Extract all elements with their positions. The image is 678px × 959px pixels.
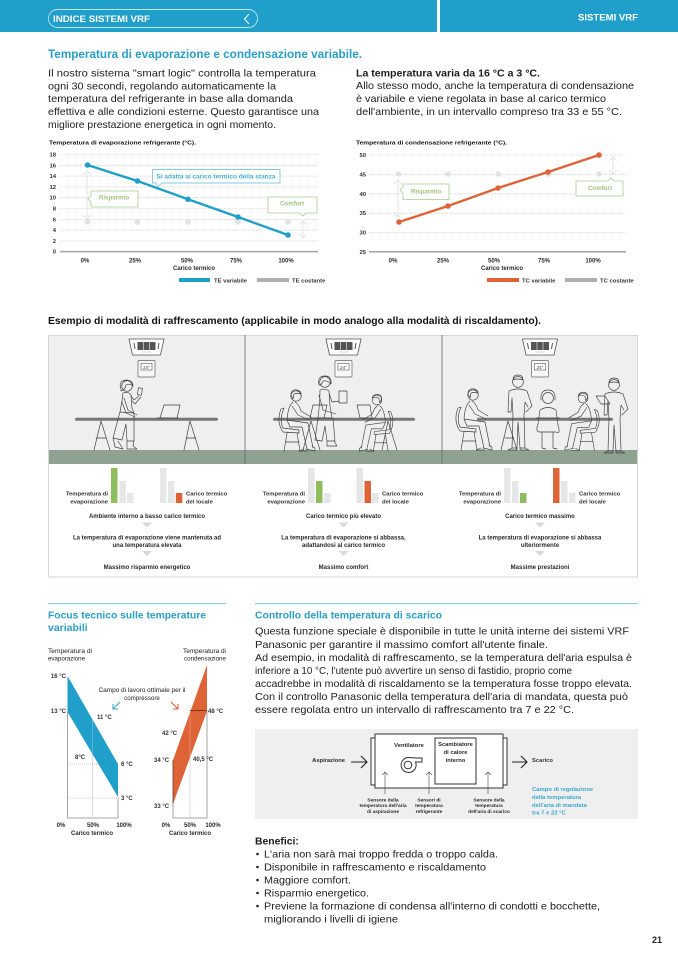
- intro text left: ogni 30 secondi, regolando automaticamente la: [48, 82, 276, 92]
- bar labels: del locale: [579, 500, 607, 506]
- control text: Questa funzione speciale è disponibile in tutte le unità interne dei sistemi VRF: [255, 626, 629, 638]
- flow text: La temperatura di evaporazione viene mantenuta ad: [73, 536, 221, 542]
- variable series line: [85, 162, 291, 238]
- callout: adapts: Si adatta al carico termico della stanza: [156, 174, 276, 180]
- intro text right: è variabile e viene regolata in base al carico termico: [356, 94, 606, 105]
- bar labels: [459, 492, 621, 506]
- y axis values: 2: [53, 239, 57, 245]
- condensation range chart: 33 °C: [154, 804, 170, 810]
- legend: TE costante: [292, 278, 326, 284]
- sensor labels: temperatura dell'aria: [360, 803, 407, 809]
- page header bar: [0, 0, 678, 32]
- constant series: [85, 219, 291, 225]
- y axis values: 8: [53, 206, 57, 212]
- chart: evaporation temperature: [49, 140, 326, 284]
- airflow labels: Aspirazione: [312, 758, 346, 764]
- axis titles: evaporazione: [48, 656, 86, 662]
- chart title: Temperatura di evaporazione refrigerante (°C).: [49, 140, 196, 146]
- ceiling unit: [326, 339, 361, 355]
- bar labels: Temperatura di: [263, 492, 305, 498]
- callout: saving: [88, 191, 138, 207]
- bar labels: Carico termico: [382, 492, 424, 498]
- x axis labels: 50%: [181, 258, 194, 264]
- condensation range chart: 100%: [205, 823, 221, 829]
- callout: saving: [400, 184, 449, 200]
- intro text left: migliore prestazione energetica in ogni momento.: [48, 120, 276, 131]
- bar labels: Carico termico: [186, 492, 228, 498]
- callout: comfort: Comfort: [588, 185, 612, 192]
- y axis values: 14: [49, 174, 57, 180]
- focus heading: Focus tecnico sulle temperature: [48, 610, 206, 622]
- standing woman: [113, 380, 142, 449]
- y axis values: 16: [49, 163, 57, 169]
- x axis labels: 0%: [81, 258, 90, 264]
- section label: SISTEMI VRF: [578, 12, 638, 24]
- evaporation range chart: 0%: [57, 823, 66, 829]
- navigation pill: [48, 10, 258, 28]
- y axis values: 12: [49, 185, 57, 191]
- unit labels: Ventilatore: [394, 743, 425, 749]
- flow text: ulteriormente: [521, 543, 560, 549]
- y axis values: 45: [359, 172, 367, 178]
- intro text right: La temperatura varia da 16 °C a 3 °C.: [356, 68, 540, 80]
- airflow arrows: [351, 756, 527, 768]
- panel: cooling scenarios: [48, 335, 638, 577]
- intro text left: [48, 68, 319, 131]
- intro text right: Allo stesso modo, anche la temperatura di condensazione: [356, 81, 634, 92]
- bar labels: [263, 492, 424, 506]
- sensor labels: di aspirazione: [367, 809, 399, 815]
- bar labels: [66, 492, 228, 506]
- bar labels: evaporazione: [267, 500, 306, 506]
- thermostat: [335, 360, 352, 377]
- evaporation range chart: 100%: [116, 823, 132, 829]
- evaporation range chart: 6 °C: [121, 762, 133, 768]
- evaporation range chart: 3 °C: [121, 796, 133, 802]
- bar labels: Temperatura di: [459, 492, 501, 498]
- thermostat: 24°: [537, 365, 544, 370]
- flow text: La temperatura di evaporazione si abbassa: [479, 536, 602, 542]
- sensor labels: Sensore della: [367, 798, 399, 804]
- intro text right: dell'ambiente, in un intervallo compreso tra 33 e 55 °C.: [356, 107, 622, 118]
- scene 1: low load: [75, 339, 218, 450]
- x axis labels: 75%: [538, 258, 551, 264]
- evaporation range chart: [51, 674, 133, 837]
- evaporation range chart: 8°C: [75, 755, 86, 761]
- regulation note: Campo di regolazione: [532, 787, 594, 793]
- x axis labels: [389, 258, 601, 272]
- axis titles: [48, 648, 227, 662]
- scene 2 bars and text: [263, 468, 424, 571]
- optimal range label: [98, 687, 186, 702]
- people: [456, 375, 628, 453]
- legend: TC costante: [600, 278, 634, 284]
- airflow labels: Scarico: [532, 758, 553, 764]
- people and laptops: [279, 376, 393, 451]
- y axis values: [359, 153, 367, 256]
- evaporation bars: [308, 468, 330, 503]
- flow text: Massime prestazioni: [511, 565, 570, 571]
- benefits list: Risparmio energetico.: [264, 888, 369, 900]
- flow text: una temperatura elevata: [112, 543, 182, 549]
- sensor labels: Sensore della: [473, 798, 505, 804]
- flow text: [479, 514, 602, 571]
- sensor labels: refrigerante: [416, 809, 443, 815]
- thermostat: [138, 360, 155, 377]
- sensor labels: [360, 798, 510, 815]
- indoor unit diagram: [255, 729, 638, 819]
- condensation range chart: 34 °C: [154, 758, 170, 764]
- y axis values: 30: [359, 231, 367, 237]
- callout: saving: Risparmio: [411, 188, 441, 196]
- benefits list: Previene la formazione di condensa all'interno di condotti e bocchette,: [264, 902, 600, 912]
- x axis labels: Carico termico: [481, 266, 523, 272]
- legend: [487, 278, 634, 284]
- optimal range label: Campo di lavoro ottimale per il: [98, 687, 186, 694]
- condensation range chart: 50%: [184, 823, 197, 829]
- flow text: Carico termico più elevato: [306, 514, 381, 520]
- y axis values: 18: [49, 152, 57, 158]
- page number: 21: [652, 935, 662, 945]
- flow text: Carico termico massimo: [505, 514, 575, 520]
- y axis values: 40: [359, 192, 367, 198]
- table: [75, 418, 218, 450]
- flow text: Massimo risparmio energetico: [104, 565, 191, 571]
- ceiling unit: [129, 339, 164, 355]
- legend: TE variabile: [214, 278, 248, 284]
- evaporation range chart: 50%: [87, 823, 100, 829]
- legend: TC variabile: [522, 278, 556, 284]
- evaporation range chart: 11 °C: [97, 715, 112, 721]
- flow text: Massimo comfort: [319, 565, 368, 571]
- bar labels: evaporazione: [70, 500, 109, 506]
- arrow: blue: [113, 702, 120, 709]
- control text: Ad esempio, in modalità di raffrescamento, se la temperatura dell'aria espulsa è: [255, 653, 632, 664]
- airflow labels: [312, 758, 553, 764]
- panel: technical focus: [48, 603, 227, 837]
- callout: saving: Risparmio: [99, 194, 129, 202]
- callout: comfort: [268, 197, 317, 216]
- scene 1 bars and text: [66, 468, 228, 571]
- intro text left: Il nostro sistema "smart logic" controlla la temperatura: [48, 68, 316, 80]
- comfort range arrows: [394, 157, 617, 217]
- control text: Panasonic per garantire il massimo comfort all'utente finale.: [255, 640, 548, 651]
- load bars: [553, 468, 576, 503]
- legend: [179, 278, 326, 284]
- flow text: Ambiente interno a basso carico termico: [89, 514, 205, 520]
- y axis values: 50: [359, 153, 367, 159]
- x axis labels: [81, 258, 294, 272]
- focus heading: variabili: [48, 622, 88, 634]
- unit labels: Scambiatore: [438, 742, 474, 748]
- y axis values: 10: [49, 196, 57, 202]
- scene 3: maximum load: [456, 339, 628, 453]
- control text: accadrebbe in modalità di riscaldamento se la temperatura fosse troppo elevata.: [255, 679, 632, 690]
- unit labels: di calore: [444, 750, 468, 756]
- control text: inferiore a 10 °C, l'utente può avvertire un senso di fastidio, proprio come: [255, 666, 572, 677]
- evaporation bars: [111, 468, 134, 503]
- sensor arrows: [382, 772, 491, 794]
- optimal range label: compressore: [124, 695, 160, 702]
- x axis labels: 100%: [585, 258, 601, 264]
- y axis values: 4: [53, 228, 57, 234]
- flow text: La temperatura di evaporazione si abbassa,: [281, 536, 406, 542]
- axis titles: condensazione: [184, 656, 227, 662]
- table: [273, 418, 415, 450]
- scene 2: higher load: [273, 339, 415, 451]
- navigation pill: INDICE SISTEMI VRF: [53, 14, 150, 25]
- scene 3 bars and text: [459, 468, 621, 571]
- bar labels: del locale: [382, 500, 410, 506]
- focus heading: [48, 610, 206, 634]
- load bars: [160, 468, 182, 503]
- benefits list: L'aria non sarà mai troppo fredda o troppo calda.: [264, 850, 498, 860]
- condensation range chart: 0%: [162, 823, 171, 829]
- evaporation range chart: 16 °C: [51, 674, 67, 680]
- condensation range chart: [154, 665, 224, 837]
- regulation note: [532, 787, 594, 816]
- chart: condensation temperature: [356, 140, 634, 284]
- callout: comfort: Comfort: [280, 200, 304, 208]
- sensor labels: temperatura: [475, 803, 503, 809]
- variable series line: [396, 152, 602, 225]
- y axis values: 25: [359, 250, 367, 256]
- intro text right: [356, 68, 634, 118]
- bar labels: Carico termico: [579, 492, 621, 498]
- thermostat: [532, 360, 548, 377]
- x axis labels: 25%: [437, 258, 450, 264]
- sensor labels: Sensori di: [417, 798, 441, 804]
- chart title: Temperatura di condensazione refrigerante (°C).: [356, 140, 507, 146]
- bar labels: del locale: [186, 500, 214, 506]
- condensation range chart: 48 °C: [208, 709, 224, 715]
- benefits list: migliorando i livelli di igiene: [264, 914, 398, 926]
- x axis labels: 25%: [129, 258, 142, 264]
- x axis labels: 50%: [488, 258, 501, 264]
- condensation range chart: Carico termico: [169, 831, 211, 837]
- load bars: [356, 468, 378, 503]
- table: [477, 418, 613, 450]
- benefits list: Maggiore comfort.: [264, 876, 351, 886]
- control heading: Controllo della temperatura di scarico: [255, 610, 442, 622]
- intro text left: effettiva e alle condizioni esterne. Questo garantisce una: [48, 107, 319, 118]
- flow text: [281, 514, 406, 571]
- ceiling unit: [522, 339, 558, 355]
- bar labels: Temperatura di: [66, 492, 108, 498]
- panel: discharge temperature control: [255, 603, 638, 926]
- control text: essere regolata entro un intervallo di raffrescamento tra 7 e 22 °C.: [255, 705, 574, 716]
- regulation note: dell'aria di mandata: [532, 803, 587, 809]
- unit casing: [371, 734, 507, 788]
- y axis values: 6: [53, 217, 57, 223]
- constant series: [396, 171, 602, 177]
- sensor labels: dell'aria di scarico: [468, 809, 510, 815]
- y axis values: 0: [53, 250, 57, 256]
- evaporation range chart: Carico termico: [71, 831, 113, 837]
- axis titles: Temperatura di: [183, 648, 226, 655]
- control text: [255, 626, 632, 716]
- benefits list: Disponibile in raffrescamento e riscaldamento: [264, 862, 486, 874]
- evaporation bars: [504, 468, 526, 503]
- condensation range chart: 40,5 °C: [193, 757, 214, 763]
- x axis labels: 0%: [389, 258, 398, 264]
- benefits list: [255, 836, 600, 926]
- callout: comfort: [576, 178, 623, 196]
- x axis labels: 100%: [278, 258, 294, 264]
- x axis labels: 75%: [230, 258, 243, 264]
- flow text: [73, 514, 221, 571]
- regulation note: della temperatura: [532, 795, 582, 801]
- y axis values: 35: [359, 211, 367, 217]
- laptop: [157, 405, 180, 418]
- regulation note: tra 7 e 22 °C: [532, 810, 567, 816]
- evaporation range chart: 13 °C: [51, 709, 67, 715]
- sensor labels: temperatura: [415, 803, 443, 809]
- control text: Con il controllo Panasonic della temperatura dell'aria di mandata, questa può: [255, 692, 628, 703]
- comfort range arrows: [83, 171, 307, 238]
- axis titles: Temperatura di: [48, 648, 92, 655]
- icon: fan: [401, 758, 422, 772]
- thermostat: 24°: [143, 365, 150, 370]
- callout: adapts: [152, 170, 280, 186]
- x axis labels: Carico termico: [173, 266, 215, 272]
- main heading: Temperatura di evaporazione e condensazione variabile.: [48, 49, 362, 61]
- condensation range chart: 42 °C: [162, 731, 178, 737]
- arrow: orange: [171, 702, 178, 709]
- unit labels: interno: [446, 758, 466, 764]
- unit labels: [394, 742, 474, 764]
- benefits list: Benefici:: [255, 836, 299, 848]
- bar labels: evaporazione: [463, 500, 502, 506]
- intro text left: temperatura del refrigerante in base alla domanda: [48, 94, 293, 105]
- flow text: adattandosi al carico termico: [302, 543, 385, 549]
- cooling example heading: Esempio di modalità di raffrescamento (applicabile in modo analogo alla modalità di riscaldamento).: [48, 315, 541, 327]
- thermostat: 24°: [340, 365, 347, 370]
- y axis values: [49, 152, 57, 256]
